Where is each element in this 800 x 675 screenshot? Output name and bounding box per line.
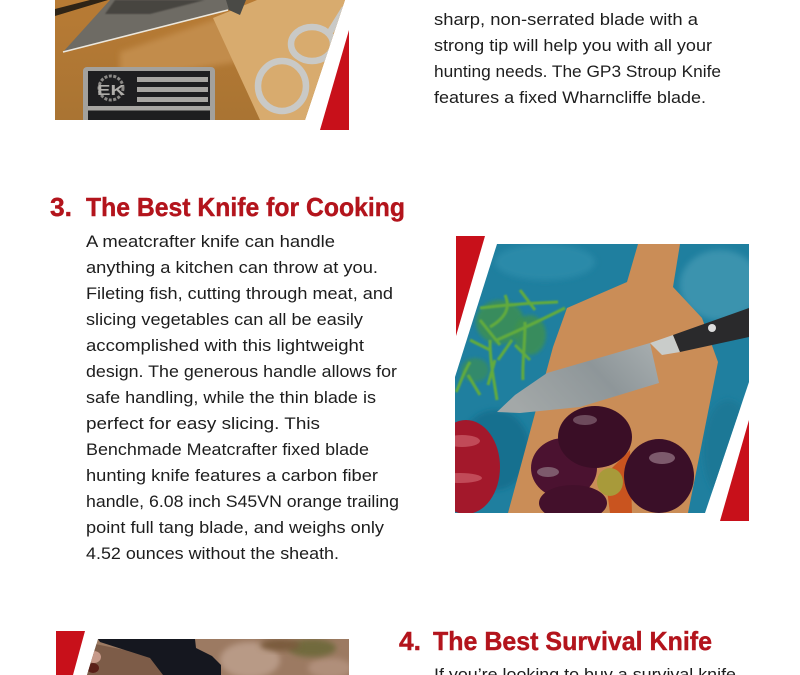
icon: knife blade [63, 0, 246, 52]
text block: hunting knife description [434, 10, 721, 107]
text block: cooking knife description: design. The generous handle allows for [86, 362, 397, 381]
dark cap [98, 639, 221, 675]
panel: photo of knife, knuckle tool and patch on wood [55, 0, 350, 130]
skin and hair [87, 644, 163, 675]
text block: cooking knife description: perfect for easy slicing. This [86, 414, 320, 433]
text block: hunting knife description: hunting needs. The GP3 Stroup Knife [434, 62, 721, 81]
icon: purple pepper [531, 406, 694, 521]
panel: photo of kitchen knife on cutting board [455, 236, 749, 521]
text block: cooking knife description: A meatcrafter knife can handle [86, 232, 335, 251]
text block: cooking knife description: slicing vegetables can all be easily [86, 310, 364, 329]
text block: cooking knife description: hunting knife features a carbon fiber [86, 466, 378, 485]
icon: green herb sprig [456, 290, 565, 400]
text block: cooking knife description: 4.52 ounces without the sheath. [86, 544, 339, 563]
heading: section 3: 3. [50, 192, 72, 222]
text block: cooking knife description: Fileting fish, cutting through meat, and [86, 284, 393, 303]
red corner triangle bottom right [720, 420, 749, 521]
icon: red pepper [455, 420, 500, 513]
icon: metal knuckle rings [258, 8, 345, 111]
text block: cooking knife description: accomplished with this lightweight [86, 336, 364, 355]
text block: cooking knife description: point full tang blade, and weighs only [86, 518, 385, 537]
text block: hunting knife description: features a fixed Wharncliffe blade. [434, 88, 706, 107]
heading: section 4: The Best Survival Knife [433, 626, 712, 656]
text block: cooking knife description [86, 232, 399, 563]
text block: cooking knife description: anything a kitchen can throw at you. [86, 258, 378, 277]
text block: hunting knife description: sharp, non-serrated blade with a [434, 10, 699, 29]
red corner triangle [320, 30, 349, 130]
red corner triangle top left [456, 236, 485, 336]
icon: kitchen knife [497, 308, 749, 413]
panel: photo of man in dark cap outdoors [56, 631, 352, 675]
icon: embroidered flag patch: EK [97, 82, 125, 99]
heading: section 4: 4. [399, 626, 421, 656]
text block: cooking knife description: handle, 6.08 inch S45VN orange trailing [86, 492, 399, 511]
text block: cooking knife description: safe handling, while the thin blade is [86, 388, 376, 407]
icon: embroidered flag patch [83, 67, 215, 125]
red corner shape [56, 631, 85, 675]
heading: section 3: The Best Knife for Cooking [86, 192, 405, 222]
text block: hunting knife description: strong tip will help you with all your [434, 36, 712, 55]
cutting board [508, 244, 718, 513]
text block: cooking knife description: Benchmade Meatcrafter fixed blade [86, 440, 369, 459]
